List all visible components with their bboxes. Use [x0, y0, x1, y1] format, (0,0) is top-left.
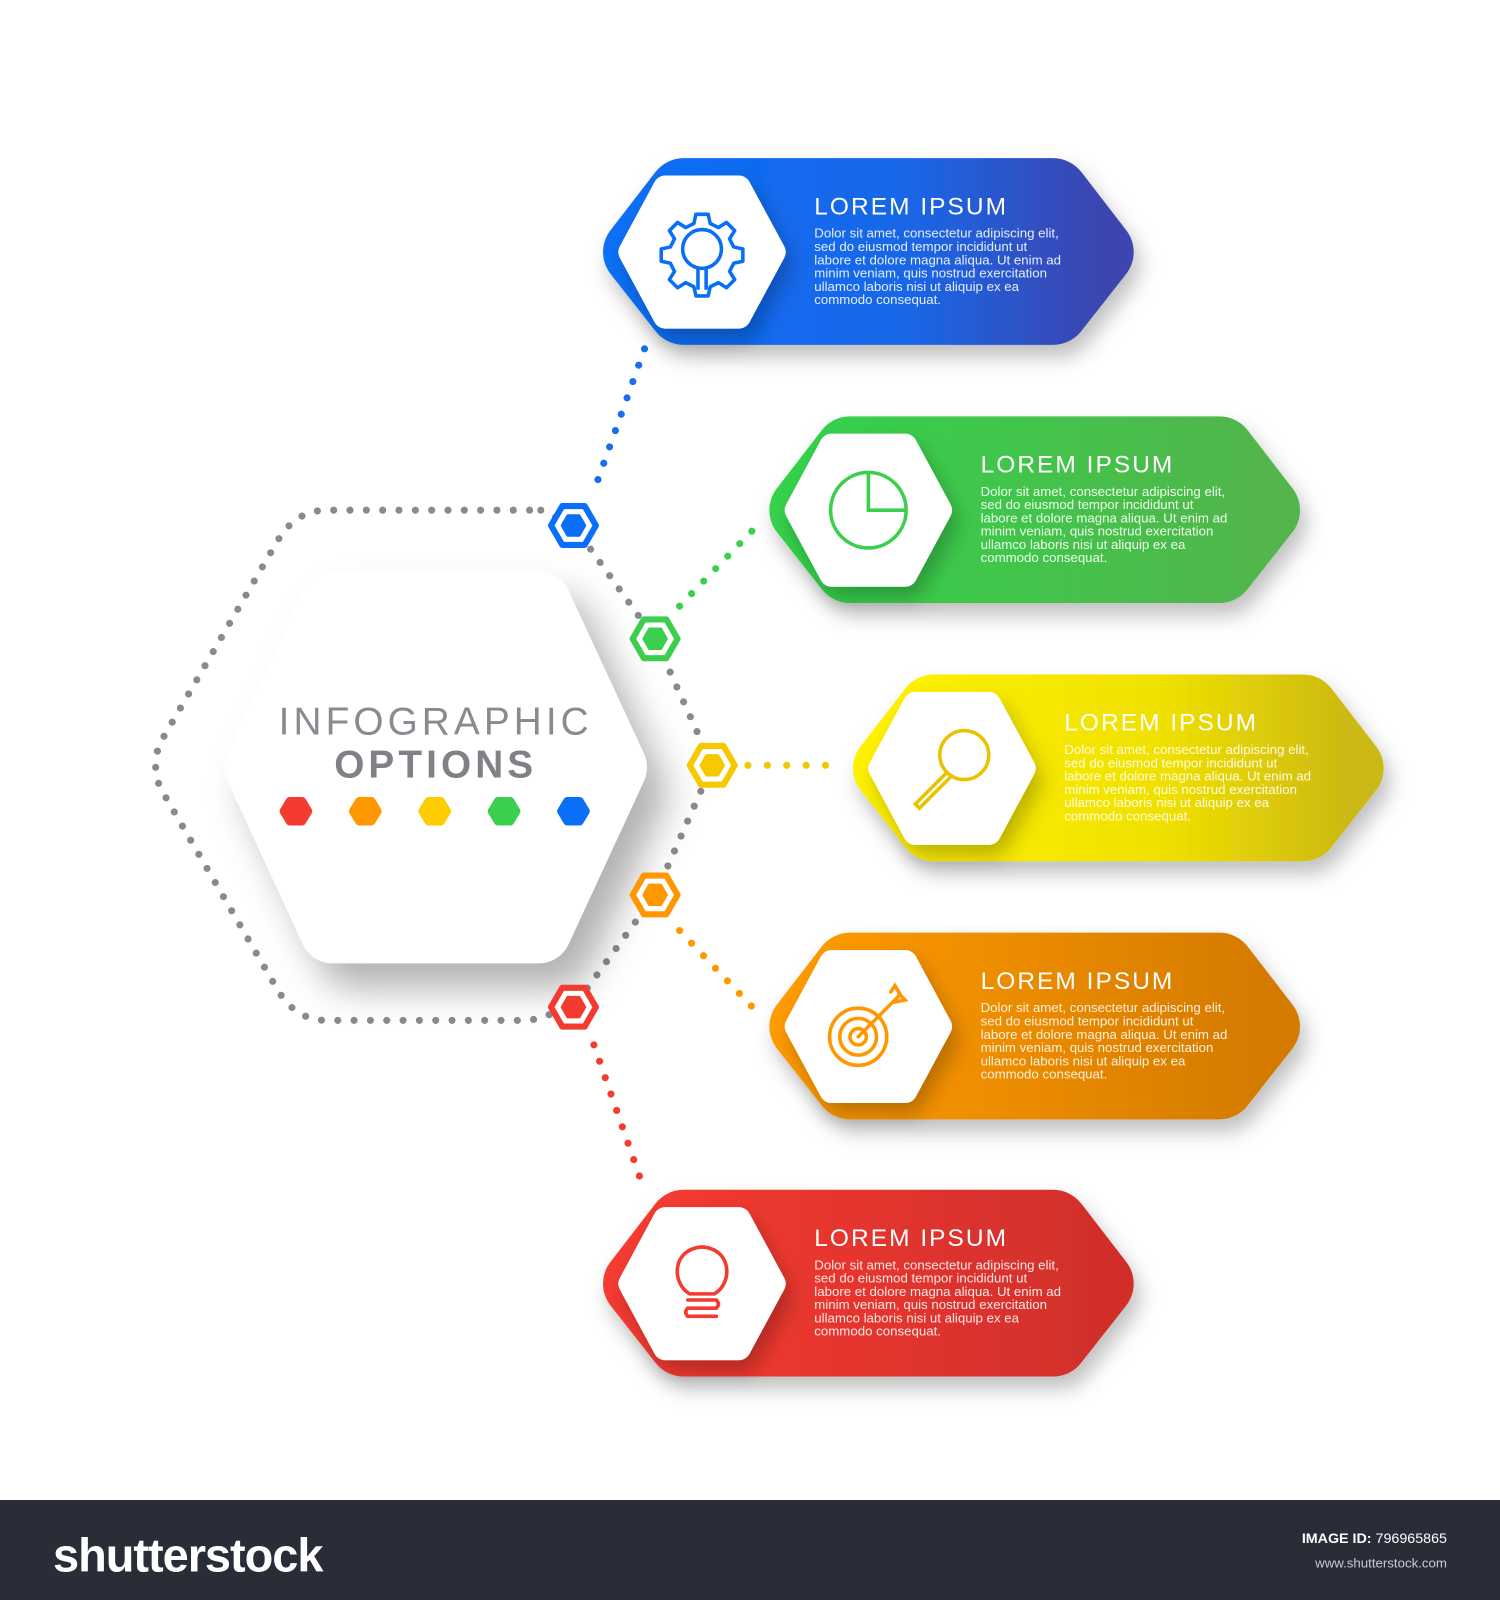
card 1: blue: LOREM IPSUM	[814, 193, 1008, 220]
card 4: orange: ullamco laboris nisi ut aliquip ex ea	[981, 1053, 1186, 1068]
card 2: green: commodo consequat.	[981, 550, 1107, 565]
card 5: red: ullamco laboris nisi ut aliquip ex ea	[814, 1310, 1020, 1325]
central hexagon	[257, 604, 614, 931]
card 5: red: LOREM IPSUM	[814, 1225, 1008, 1252]
card 2: green: LOREM IPSUM	[981, 451, 1174, 478]
icon: target	[830, 986, 905, 1065]
card 2: green: minim veniam, quis nostrud exercitation	[981, 524, 1213, 539]
card 1: blue: minim veniam, quis nostrud exercitation	[814, 266, 1047, 281]
node: yellow	[690, 746, 735, 785]
card 4: orange: commodo consequat.	[981, 1067, 1107, 1082]
card 4: orange: Dolor sit amet, consectetur adipiscing elit,	[981, 1000, 1225, 1015]
connector: orange	[680, 931, 760, 1015]
node: red	[551, 988, 596, 1027]
footer bar	[0, 1500, 1500, 1600]
card 1: blue: labore et dolore magna aliqua. Ut enim ad	[814, 252, 1061, 267]
card 5: red	[631, 1219, 1098, 1348]
card 4: orange: labore et dolore magna aliqua. Ut enim ad	[981, 1027, 1227, 1042]
card 1: blue: commodo consequat.	[814, 292, 941, 307]
card 2: green: labore et dolore magna aliqua. Ut enim ad	[981, 510, 1227, 525]
card 2: green: ullamco laboris nisi ut aliquip ex ea	[981, 537, 1186, 552]
connector: yellow	[748, 762, 845, 769]
connector: green	[680, 522, 760, 606]
icon: pie chart	[831, 472, 906, 548]
footer logo: shutterstock	[53, 1529, 324, 1581]
central title: OPTIONS	[334, 744, 537, 787]
card 3: yellow	[881, 704, 1348, 833]
connector: blue	[598, 345, 646, 480]
central title	[279, 701, 593, 787]
card 2: green: Dolor sit amet, consectetur adipiscing elit,	[981, 484, 1225, 499]
card 5: red: commodo consequat.	[814, 1324, 941, 1339]
footer image id: IMAGE ID: 796965865	[1302, 1531, 1447, 1547]
card 2: green: sed do eiusmod tempor incididunt ut	[981, 497, 1194, 512]
card 5: red: labore et dolore magna aliqua. Ut enim ad	[814, 1284, 1061, 1299]
card 3: yellow: sed do eiusmod tempor incididunt ut	[1064, 755, 1277, 770]
node: blue	[551, 506, 596, 545]
connector: red	[594, 1045, 645, 1192]
card 1: blue: ullamco laboris nisi ut aliquip ex ea	[814, 279, 1020, 294]
card 3: yellow: labore et dolore magna aliqua. Ut enim ad	[1064, 769, 1311, 784]
card 3: yellow: Dolor sit amet, consectetur adipiscing elit,	[1064, 742, 1309, 757]
card 5: red: minim veniam, quis nostrud exercitation	[814, 1297, 1047, 1312]
node: green	[633, 619, 678, 658]
card 3: yellow: LOREM IPSUM	[1064, 710, 1258, 737]
card 3: yellow: commodo consequat.	[1064, 808, 1191, 823]
card 4: orange: sed do eiusmod tempor incididunt ut	[981, 1014, 1194, 1029]
card 3: yellow: minim veniam, quis nostrud exercitation	[1064, 782, 1297, 797]
icon: light bulb	[677, 1247, 727, 1316]
card 4: orange	[797, 962, 1264, 1091]
card 3: yellow: ullamco laboris nisi ut aliquip ex ea	[1064, 795, 1270, 810]
card 4: orange: LOREM IPSUM	[981, 968, 1174, 995]
card 5: red: Dolor sit amet, consectetur adipiscing elit,	[814, 1257, 1059, 1272]
card 1: blue: Dolor sit amet, consectetur adipiscing elit,	[814, 226, 1059, 241]
node: orange	[633, 876, 678, 914]
card 4: orange: minim veniam, quis nostrud exercitation	[981, 1040, 1213, 1055]
card 5: red: sed do eiusmod tempor incididunt ut	[814, 1271, 1027, 1286]
icon: magnifier	[915, 731, 989, 808]
footer url: www.shutterstock.com	[1314, 1555, 1447, 1570]
dotted hexagon ring	[156, 510, 712, 1020]
card 1: blue: sed do eiusmod tempor incididunt ut	[814, 239, 1027, 254]
card 2: green	[797, 446, 1264, 574]
color legend dots	[284, 801, 586, 821]
icon: gear	[661, 214, 743, 296]
central title: INFOGRAPHIC	[279, 701, 593, 744]
card 1: blue	[631, 188, 1098, 316]
